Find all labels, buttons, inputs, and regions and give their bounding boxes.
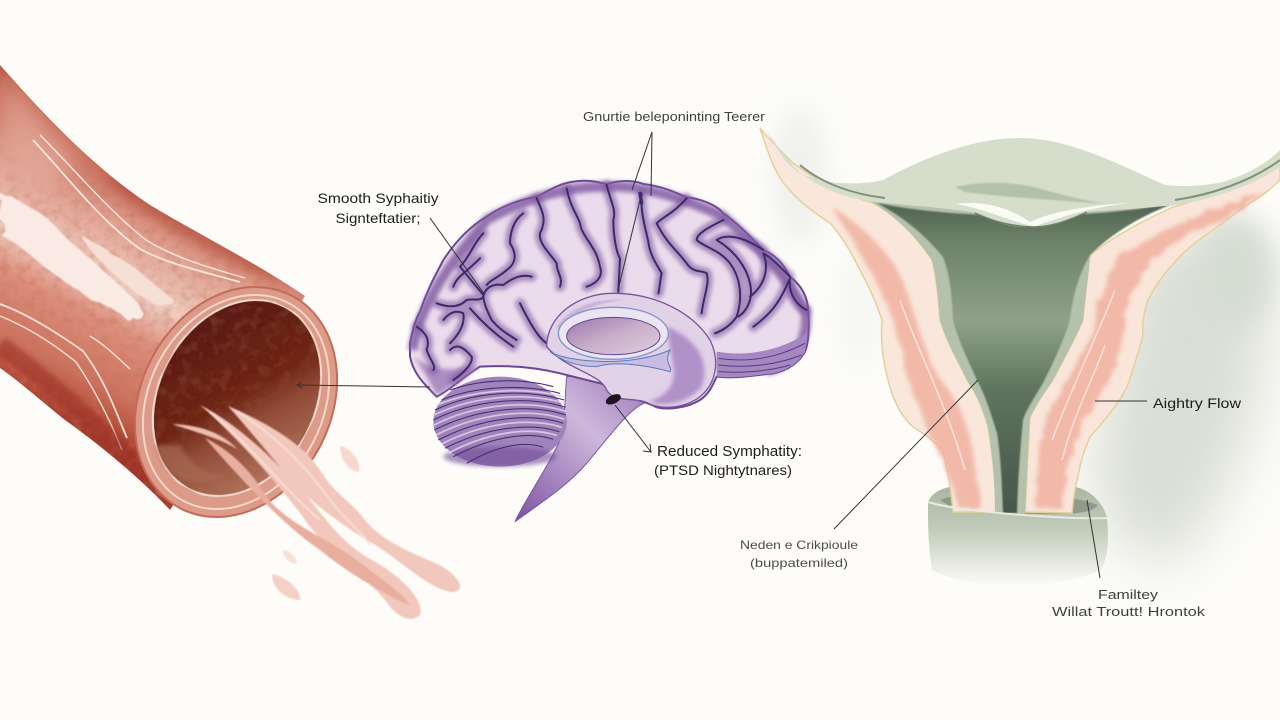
label: smooth sympathy: Signteftatier; [336,210,420,226]
label: reduced sympathy: (PTSD Nightytnares) [654,463,792,478]
label: smooth sympathy: Smooth Syphaitiy [318,190,438,206]
left wall [760,128,998,512]
lumen lower shading [155,445,240,482]
label: neden crikpioule: (buppatemiled) [750,556,848,570]
green inner lining [865,198,1180,514]
vessel lumen [120,270,354,526]
cuff front lip [928,502,1107,518]
brainstem [515,370,667,522]
label: reduced sympathy: Reduced Symphatity: [657,444,802,460]
panel: brain illustration [410,181,809,522]
gyri lines [417,185,807,380]
cerebellum [433,377,567,467]
label: neden crikpioule: Neden e Crikpioule [740,538,858,552]
left wall salmon texture [830,205,982,508]
upper membrane [763,125,1280,227]
dark spot [604,392,622,407]
callout lines and arrows [297,132,1147,578]
label: familtey: Willat Troutt! Hrontok [1052,604,1206,619]
label: neden crikpioule [740,538,858,570]
vessel opening ring [96,251,376,553]
label: reduced sympathy [654,444,802,478]
cuff inner opening [940,493,1098,514]
label: top brain: Gnurtie beleponinting Teerer [583,109,766,124]
soft green wash [772,105,1275,561]
cervix cuff [928,486,1108,586]
right wall salmon texture [1036,190,1265,508]
label: flow: Aightry Flow [1153,395,1242,411]
vessel tube body [0,60,305,510]
purple shading along outer edge [413,187,806,371]
lower-left frontal shading [413,357,480,395]
label: smooth sympathy [318,190,438,226]
label: familtey [1052,587,1206,619]
panel: uterus illustration [760,105,1280,586]
right lower lobe stripes [717,333,807,377]
limbic arc and temporal lobe [547,293,716,407]
panel: blood vessel illustration [0,60,460,619]
wall pale streaks [900,290,1115,470]
right wall [1025,165,1280,513]
sulci halo [417,185,807,380]
vessel ring inner line [107,262,365,542]
label: familtey: Familtey [1098,587,1159,602]
cerebrum [410,181,809,409]
dark cavity [877,203,1175,513]
pink strands flowing out [172,405,460,619]
